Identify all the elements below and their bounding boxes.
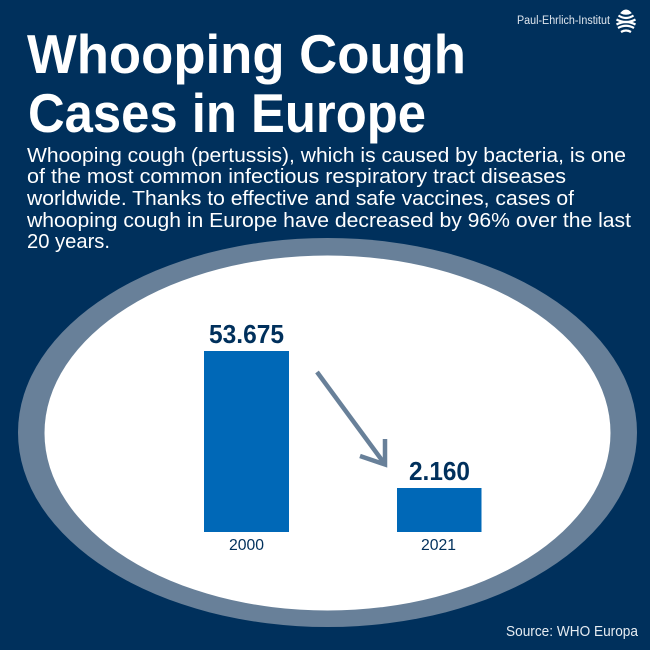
- intro text: of the most common infectious respiratory tract diseases: [27, 165, 566, 188]
- bar chart: [204, 319, 482, 554]
- intro text: 20 years.: [27, 230, 110, 253]
- icon: institute emblem: [616, 10, 636, 32]
- bar: 2000: [204, 319, 289, 554]
- bar: 2021: 2.160: [409, 456, 470, 486]
- source: Source: WHO Europa: [506, 624, 639, 640]
- logo: Paul-Ehrlich-Institut: [517, 10, 636, 32]
- bar: 2021: [397, 456, 482, 554]
- title: Whooping Cough: [27, 23, 466, 85]
- bar: 2000: 2000: [229, 537, 264, 554]
- bar: 2021: 2021: [421, 537, 456, 554]
- intro text: [26, 144, 631, 253]
- arrow: decline: [317, 372, 385, 464]
- logo: Paul-Ehrlich-Institut: Paul-Ehrlich-Institut: [517, 15, 611, 27]
- bar: 2000: 53.675: [209, 319, 284, 349]
- intro text: worldwide. Thanks to effective and safe vaccines, cases of: [26, 187, 574, 210]
- ellipse panel: [18, 238, 637, 627]
- intro text: Whooping cough (pertussis), which is caused by bacteria, is one: [27, 144, 626, 167]
- intro text: whooping cough in Europe have decreased by 96% over the last: [26, 209, 631, 232]
- title: [27, 23, 466, 144]
- title: Cases in Europe: [28, 82, 426, 144]
